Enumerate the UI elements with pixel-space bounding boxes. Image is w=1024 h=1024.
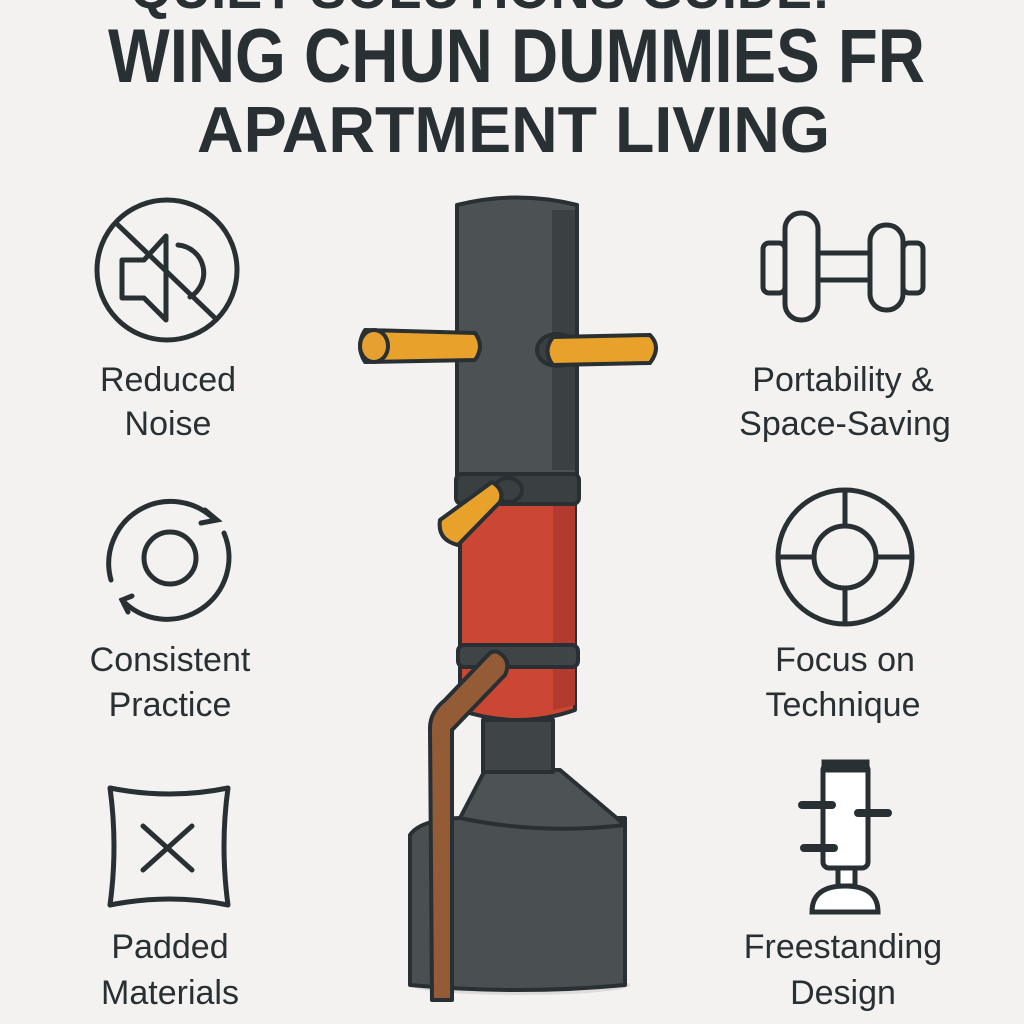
label: freestanding design bbox=[744, 928, 942, 1012]
title: APARTMENT LIVING bbox=[197, 93, 830, 166]
label: padded materials: Materials bbox=[101, 974, 239, 1012]
title bbox=[108, 0, 925, 166]
icon: target bbox=[778, 490, 912, 624]
icon: consistent practice bbox=[109, 501, 229, 619]
label: portability: Space-Saving bbox=[739, 405, 951, 443]
label: portability bbox=[739, 361, 951, 443]
label: portability: Portability & bbox=[752, 361, 934, 399]
label: reduced noise: Noise bbox=[125, 405, 211, 443]
icon: dumbbell bbox=[763, 213, 923, 320]
label: reduced noise: Reduced bbox=[100, 361, 236, 399]
icon: freestanding dummy bbox=[802, 762, 888, 912]
label: reduced noise bbox=[100, 361, 236, 443]
dummy illustration bbox=[360, 198, 656, 1000]
label: consistent practice: Consistent bbox=[90, 641, 251, 679]
label: padded materials bbox=[101, 928, 239, 1012]
label: padded materials: Padded bbox=[111, 928, 229, 966]
label: freestanding design: Freestanding bbox=[744, 928, 942, 966]
icon: padded materials bbox=[110, 788, 228, 905]
label: focus on technique bbox=[765, 641, 921, 724]
label: consistent practice bbox=[90, 641, 251, 724]
label: consistent practice: Practice bbox=[109, 686, 231, 724]
label: freestanding design: Design bbox=[790, 974, 896, 1012]
label: focus on technique: Technique bbox=[765, 686, 921, 724]
icon: reduced noise bbox=[97, 200, 237, 340]
label: focus on technique: Focus on bbox=[775, 641, 915, 679]
